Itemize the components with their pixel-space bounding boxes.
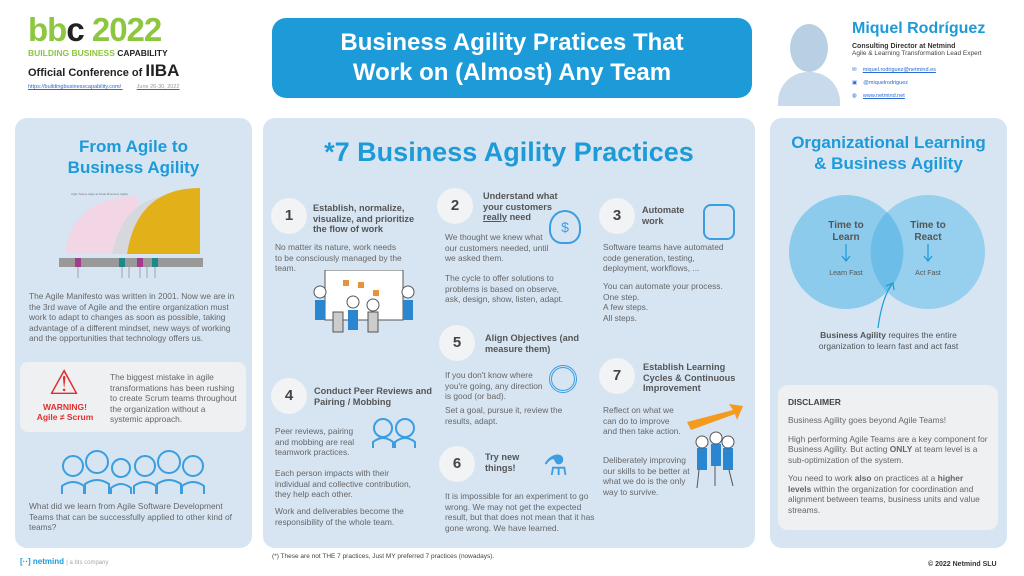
disclaimer box: You need to work also on practices at a higher levels within the organization for coordination and alignment between teams, business units and value streams. xyxy=(788,473,980,514)
heading: From Agile to xyxy=(79,137,188,156)
author info xyxy=(852,20,985,99)
practice 2: The cycle to offer solutions to problems is based on observe, ask, design, show, listen, adapt. xyxy=(445,273,563,304)
copyright: © 2022 Netmind SLU xyxy=(928,561,997,568)
heading: & Business Agility xyxy=(814,154,963,173)
icon: lightbulb xyxy=(549,210,581,244)
author info: ✉ miquel.rodriguez@netmind.es xyxy=(852,67,936,73)
warning box: Agile ≠ Scrum xyxy=(37,412,93,422)
practice 3: Automate work xyxy=(642,205,684,226)
practice 4: 4 xyxy=(285,387,293,404)
panel: organizational learning xyxy=(770,118,1007,548)
illustration: team at board xyxy=(314,270,414,332)
practice 4: Each person impacts with their individual and collective contribution, they help each other. xyxy=(275,468,411,499)
footer logo: netmind: [··] netmind | a bts company xyxy=(20,557,108,566)
icon: robot xyxy=(703,204,735,240)
venn diagram xyxy=(789,195,985,328)
practice 2: 2 xyxy=(451,197,459,214)
author info: Consulting Director at Netmind xyxy=(852,43,955,50)
chart: waves of agile: Agile Teams Agile at Scale Business Agility xyxy=(71,192,128,196)
practice 1: No matter its nature, work needs to be consciously managed by the team. xyxy=(275,242,402,273)
practice 2 xyxy=(437,188,581,304)
practice 6: Try new things! xyxy=(485,452,519,472)
logo: bbc 2022: bbc 2022 xyxy=(28,11,161,48)
venn diagram: Learn xyxy=(832,232,860,243)
icon: pair xyxy=(372,418,416,448)
practice 3: Software teams have automated code generation, testing, deployment, workflows, ... xyxy=(603,242,724,273)
practice 3: A few steps. xyxy=(603,302,648,312)
venn diagram: Learn Fast xyxy=(829,270,863,277)
practice 3 xyxy=(599,198,735,322)
practice 4: Work and deliverables become the responsibility of the whole team. xyxy=(275,506,404,526)
icon: target xyxy=(549,365,577,393)
icon: lightbulb: $ xyxy=(561,219,569,235)
practice 2: We thought we knew what our customers needed, until we asked them. xyxy=(445,232,548,263)
practice 4 xyxy=(271,378,432,526)
practice 7: Deliberately improving our skills to be better at what we do is the only way to survive. xyxy=(603,455,690,496)
practice 6 xyxy=(439,446,594,532)
practice 7: Reflect on what we can do to improve and then take action. xyxy=(603,405,681,436)
warning box: WARNING! xyxy=(43,402,87,412)
practice 5: Align Objectives (and measure them) xyxy=(485,333,579,354)
warning box xyxy=(20,362,246,432)
chart: waves of agile xyxy=(59,188,203,278)
practice 7: 7 xyxy=(613,367,621,384)
author info: Agile & Learning Transformation Lead Expert xyxy=(852,50,982,57)
heading xyxy=(791,133,986,173)
author photo xyxy=(778,24,840,106)
practice 1: 1 xyxy=(285,207,293,224)
logo: bbc 2022: BUILDING BUSINESS CAPABILITY xyxy=(28,48,168,58)
title banner: Work on (Almost) Any Team xyxy=(353,59,671,86)
practice 5: Set a goal, pursue it, review the results, adapt. xyxy=(445,405,562,426)
logo: bbc 2022: https://buildingbusinesscapability.com/ June 26-30, 2022 xyxy=(28,84,180,90)
heading: Business Agility xyxy=(68,158,199,177)
icon: team xyxy=(61,450,205,494)
venn diagram: Act Fast xyxy=(915,270,941,277)
venn diagram: Time to xyxy=(910,220,946,231)
venn diagram: React xyxy=(914,232,942,243)
practice 5: If you don't know where you're going, any direction is good (or bad). xyxy=(445,370,543,401)
text: business agility requires xyxy=(819,330,958,351)
practice 5 xyxy=(439,325,579,426)
practice 1: Establish, normalize, visualize, and prioritize the flow of work xyxy=(313,203,414,234)
disclaimer box: DISCLAIMER xyxy=(788,397,841,407)
practice 4: Conduct Peer Reviews and Pairing / Mobbing xyxy=(314,386,432,406)
author info: ◍ www.netmind.net xyxy=(852,93,905,99)
warning box: The biggest mistake in agile transformations has been rushing to create Scrum teams throughout the organization without a systemic approach. xyxy=(110,372,237,424)
practice 3: 3 xyxy=(613,207,621,224)
practice 4: Peer reviews, pairing and mobbing are real teamwork practices. xyxy=(275,426,354,457)
panel: 7 practices xyxy=(263,118,755,548)
practice 6: It is impossible for an experiment to go wrong. We may not get the expected result, but that does not mean that it has gone wrong. We have learned. xyxy=(445,491,594,532)
practice 3: All steps. xyxy=(603,312,637,322)
illustration: team with arrow xyxy=(687,404,743,488)
author info: ▣ @miquelrodriguez xyxy=(852,80,908,86)
panel: from agile to business agility xyxy=(15,118,252,548)
heading: Organizational Learning xyxy=(791,133,986,152)
text: agile manifesto: The Agile Manifesto was written in 2001. Now we are in the 3rd wave of Agile and the entire organization must work to adapt to changes as soon as possible, taking advantage of a different mindset, new ways of working and the opportunities that technology offers us. xyxy=(29,291,234,343)
text: business agility requires: Business Agility requires the entire xyxy=(820,330,957,340)
text: question: What did we learn from Agile Software Development Teams that can be successfully applied to other kind of teams? xyxy=(29,501,232,532)
footnote: (*) These are not THE 7 practices, Just MY preferred 7 practices (nowadays). xyxy=(272,553,494,560)
practice 5: 5 xyxy=(453,334,461,351)
practice 3: You can automate your process. xyxy=(603,281,723,291)
heading: *7 Business Agility Practices xyxy=(324,137,694,167)
logo: bbc 2022 xyxy=(28,11,180,90)
author info: Miquel Rodríguez xyxy=(852,20,985,37)
disclaimer box xyxy=(778,385,998,530)
practice 2: Understand what your customers really need xyxy=(483,191,558,222)
practice 6: 6 xyxy=(453,455,461,472)
title banner xyxy=(272,18,752,98)
practice 1 xyxy=(271,198,414,332)
venn diagram: Time to xyxy=(828,220,864,231)
text: business agility requires: organization to learn fast and act fast xyxy=(819,341,958,351)
heading xyxy=(68,137,200,177)
practice 7 xyxy=(599,358,743,496)
icon: flask: ⚗ xyxy=(543,450,568,481)
disclaimer box: Business Agility goes beyond Agile Teams! xyxy=(788,415,946,425)
icon: warning: ⚠ xyxy=(49,364,79,402)
disclaimer box: High performing Agile Teams are a key component for Business Agility. But acting ONLY at team level is a sub-optimization of the system. xyxy=(788,434,988,464)
title banner: Business Agility Pratices That xyxy=(340,29,684,56)
practice 7: Establish Learning Cycles & Continuous Improvement xyxy=(643,362,735,393)
practice 3: One step. xyxy=(603,292,639,302)
logo: bbc 2022: Official Conference of IIBA xyxy=(28,61,179,80)
